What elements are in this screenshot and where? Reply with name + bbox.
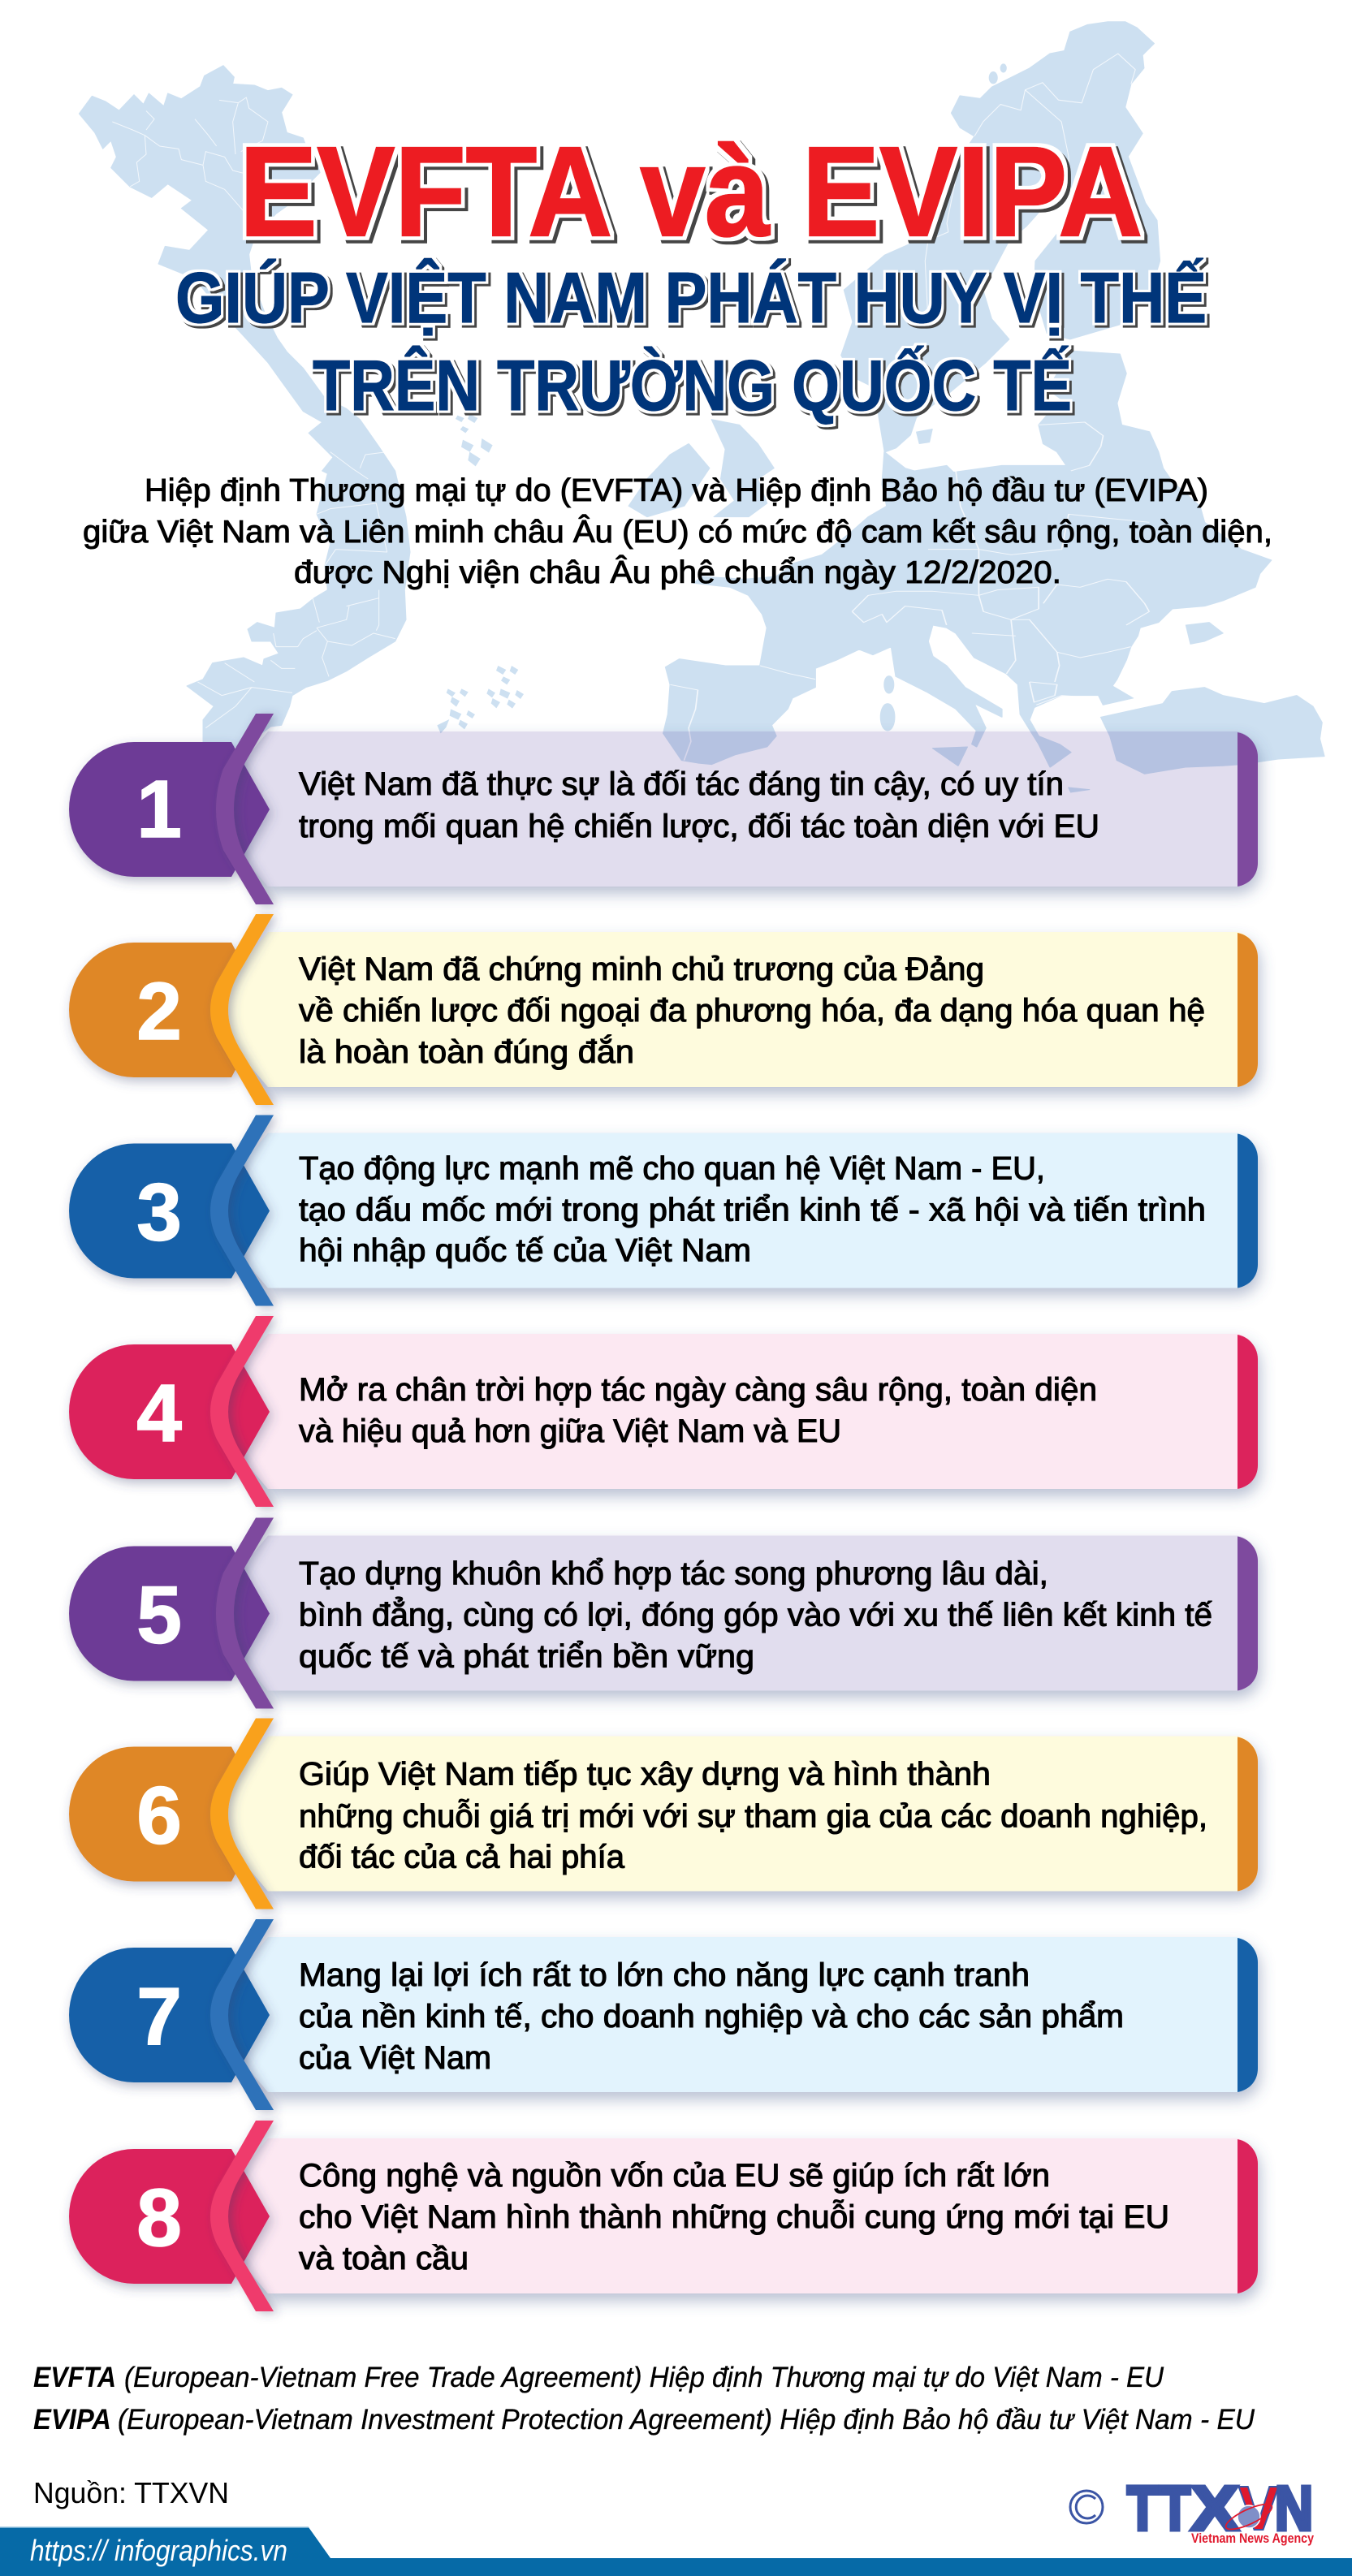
- panel: item 2: 2: [136, 966, 182, 1057]
- icon: copyright symbol: [1070, 2491, 1103, 2523]
- panel: item 1: 1: [136, 764, 182, 855]
- panel: item 6: [69, 1718, 1258, 1909]
- intro paragraph: giữa Việt Nam và Liên minh châu Âu (EU) có mức độ cam kết sâu rộng, toàn diện,: [83, 515, 1272, 550]
- footnote: EVFTA definition: EVFTA: [33, 2362, 116, 2393]
- footnote: EVIPA definition: EVIPA: [33, 2404, 111, 2436]
- panel: item 3: hội nhập quốc tế của Việt Nam: [299, 1232, 751, 1268]
- panel: item 5: quốc tế và phát triển bền vững: [299, 1638, 754, 1674]
- map: Continental Europe: [628, 351, 1324, 792]
- panel: item 5: bình đẳng, cùng có lợi, đóng góp vào với xu thế liên kết kinh tế: [299, 1596, 1212, 1633]
- panel: item 7: của Việt Nam: [299, 2040, 491, 2076]
- panel: item 8: [69, 2121, 1258, 2311]
- icon: globe with orbit: [1223, 2500, 1275, 2534]
- logo: TTXVN: V: [1238, 2474, 1279, 2544]
- panel: item 3: 3: [136, 1167, 182, 1258]
- panel: item 5: 5: [136, 1570, 182, 1661]
- subtitle line 1: GIÚP VIỆT NAM PHÁT HUY VỊ THẾ: [175, 257, 1207, 338]
- panel: item 2: về chiến lược đối ngoại đa phương hóa, đa dạng hóa quan hệ: [299, 993, 1205, 1029]
- intro paragraph: Hiệp định Thương mại tự do (EVFTA) và Hiệp định Bảo hộ đầu tư (EVIPA): [145, 473, 1208, 508]
- panel: item 2: là hoàn toàn đúng đắn: [299, 1033, 634, 1070]
- panel: item 5: [69, 1518, 1258, 1708]
- map: Vietnam: [79, 66, 524, 747]
- panel: item 7: của nền kinh tế, cho doanh nghiệp và cho các sản phẩm: [299, 1999, 1124, 2034]
- subtitle line 2: TRÊN TRƯỜNG QUỐC TẾ: [313, 345, 1072, 425]
- source line: Nguồn: TTXVN: [33, 2476, 229, 2509]
- panel: item 1: trong mối quan hệ chiến lược, đối tác toàn diện với EU: [299, 809, 1099, 844]
- panel: item 4: và hiệu quả hơn giữa Việt Nam và EU: [299, 1413, 841, 1449]
- panel: item 8: Công nghệ và nguồn vốn của EU sẽ giúp ích rất lớn: [299, 2158, 1050, 2194]
- panel: item 6: những chuỗi giá trị mới với sự tham gia của các doanh nghiệp,: [299, 1797, 1207, 1835]
- panel: item 2: [69, 914, 1258, 1105]
- footnote: EVFTA definition: (European-Vietnam Free Trade Agreement) Hiệp định Thương mại tự do Việt Nam - EU: [124, 2362, 1164, 2393]
- panel: item 2: Việt Nam đã chứng minh chủ trương của Đảng: [299, 951, 984, 987]
- footnote: EVIPA definition: (European-Vietnam Investment Protection Agreement) Hiệp định Bảo hộ đầu tư Việt Nam - EU: [118, 2404, 1255, 2436]
- intro paragraph: [83, 473, 1272, 590]
- panel: item 4: [69, 1316, 1258, 1507]
- footer bar: [0, 2527, 1352, 2576]
- panel: item 1: [69, 714, 1258, 904]
- logo: TTXVN: [1070, 2474, 1314, 2546]
- logo: TTXVN: T: [1160, 2474, 1190, 2544]
- panel: item 7: Mang lại lợi ích rất to lớn cho năng lực cạnh tranh: [299, 1957, 1030, 1993]
- map: Scandinavia: [841, 22, 1160, 452]
- panel: item 1: Việt Nam đã thực sự là đối tác đáng tin cậy, có uy tín: [299, 766, 1064, 802]
- panel: item 4: 4: [136, 1368, 182, 1459]
- panel: item 6: Giúp Việt Nam tiếp tục xây dựng và hình thành: [299, 1757, 991, 1793]
- panel: item 6: đối tác của cả hai phía: [299, 1840, 625, 1875]
- panel: item 7: 7: [136, 1971, 182, 2062]
- logo: TTXVN: X: [1191, 2474, 1238, 2544]
- panel: item 8: và toàn cầu: [299, 2241, 469, 2276]
- panel: item 4: Mở ra chân trời hợp tác ngày càng sâu rộng, toàn diện: [299, 1372, 1097, 1408]
- panel: item 3: Tạo động lực mạnh mẽ cho quan hệ Việt Nam - EU,: [299, 1151, 1045, 1187]
- panel: item 3: tạo dấu mốc mới trong phát triển kinh tế - xã hội và tiến trình: [299, 1192, 1206, 1228]
- background map: Vietnam and Europe: [79, 22, 1324, 792]
- footer bar: https:// infographics.vn: [30, 2534, 287, 2567]
- panel: item 7: [69, 1919, 1258, 2110]
- panel: item 8: cho Việt Nam hình thành những chuỗi cung ứng mới tại EU: [299, 2198, 1169, 2235]
- logo: TTXVN: Vietnam News Agency: [1191, 2531, 1314, 2546]
- intro paragraph: được Nghị viện châu Âu phê chuẩn ngày 12/2/2020.: [294, 555, 1061, 590]
- panel: item 3: [69, 1115, 1258, 1305]
- title: EVFTA và EVIPA: EVFTA và EVIPA: [240, 121, 1143, 263]
- logo: TTXVN: N: [1275, 2474, 1313, 2544]
- logo: TTXVN: T: [1127, 2474, 1158, 2544]
- panel: item 8: 8: [136, 2173, 182, 2263]
- panel: item 6: 6: [136, 1770, 182, 1861]
- panel: item 5: Tạo dựng khuôn khổ hợp tác song phương lâu dài,: [299, 1556, 1048, 1591]
